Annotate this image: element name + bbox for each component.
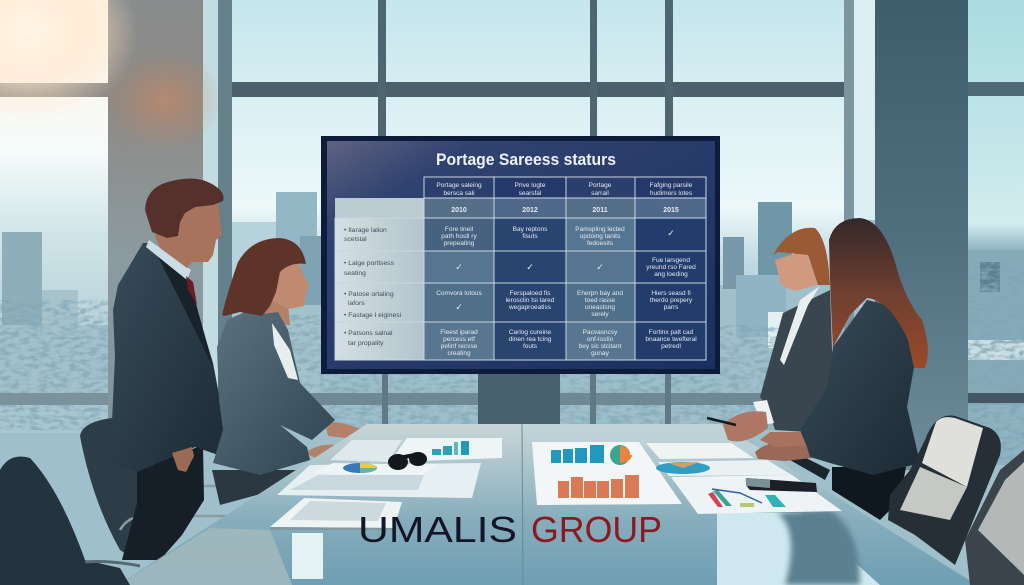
chair base rails — [120, 486, 250, 530]
orange glare on pillar — [105, 50, 225, 150]
column headers and cell text: fisuts — [522, 233, 538, 240]
column headers and cell text: lerosclin tsi tared — [506, 297, 555, 304]
column headers and cell text: Bay reptons — [513, 226, 548, 233]
paper under hands — [330, 440, 402, 462]
bright reflection — [292, 533, 323, 579]
dark trousers — [212, 470, 300, 505]
tablet — [707, 418, 736, 425]
column headers and cell text: bersca sali — [443, 190, 475, 197]
chair: white right — [888, 416, 1001, 565]
column headers and cell text: serely — [591, 311, 609, 318]
lapel shadow — [152, 245, 212, 365]
column headers and cell text: ✓ — [596, 262, 604, 272]
column headers and cell text: ✓ — [455, 262, 463, 272]
hair — [829, 218, 928, 368]
documents right group — [532, 442, 842, 514]
upper right sheet — [646, 443, 754, 459]
person: woman with long dark hair — [755, 218, 928, 520]
hands — [755, 440, 812, 461]
window reflection — [717, 513, 880, 585]
column headers and cell text: Portage — [589, 182, 612, 189]
column headers and cell text: Hiers seasd fi — [651, 290, 691, 297]
brand logo — [358, 509, 662, 550]
window: left — [0, 0, 108, 430]
column headers and cell text: ✓ — [667, 228, 675, 238]
column headers and cell text: Fue larsgend — [652, 257, 690, 264]
teal bars — [551, 445, 604, 463]
column headers and cell text: ✓ — [455, 302, 463, 312]
row labels: scelstal — [344, 236, 367, 243]
column headers and cell text: percess etf — [443, 336, 475, 343]
column headers and cell text: creating — [447, 350, 471, 357]
column headers and cell text: Fortinx palt cad — [649, 329, 694, 336]
large report sheet — [277, 463, 481, 498]
person: woman with red-brown hair — [707, 228, 833, 480]
hand and cuff — [172, 447, 194, 472]
pie sheet — [656, 460, 792, 476]
window: centre — [222, 0, 862, 430]
row labels: lafors — [348, 300, 365, 307]
hand with stylus — [723, 411, 768, 442]
column headers and cell text: 2012 — [522, 207, 538, 214]
table sunlight patches — [118, 528, 292, 585]
column headers and cell text: Pamspling lected — [575, 226, 625, 233]
column headers and cell text: path hostl ry — [441, 233, 477, 240]
line chart sheet — [671, 475, 842, 514]
column headers and cell text: wegaproeatiss — [508, 304, 552, 311]
column headers and cell text: Comvora lotous — [436, 290, 483, 297]
column headers and cell text: Fafging parsile — [650, 182, 693, 189]
smartphone — [746, 478, 817, 492]
column headers and cell text: 2010 — [451, 207, 467, 214]
orange bars — [558, 475, 639, 498]
trousers — [122, 445, 204, 560]
column headers and cell text: Carlog cureine — [509, 329, 552, 336]
column headers and cell text: 2015 — [663, 207, 679, 214]
row labels — [344, 227, 402, 347]
row labels: • Fastage ł eiginesi — [344, 312, 402, 319]
sunlight glare — [0, 0, 138, 122]
neck and face — [155, 203, 222, 268]
cuff — [753, 400, 774, 425]
row labels: • Patsons salnal — [344, 330, 393, 337]
row labels: • Patose ortaling — [344, 291, 394, 298]
wall screen — [321, 136, 720, 374]
column headers and cell text: Fleest iparad — [440, 329, 478, 336]
small top sheet — [312, 463, 438, 475]
column headers and cell text: Eherpn bay and — [577, 290, 623, 297]
person: man in suit — [110, 178, 227, 560]
reflected figures — [777, 510, 860, 585]
skyline texture — [0, 300, 108, 430]
dark trousers — [770, 440, 830, 480]
shirt collar — [146, 240, 191, 280]
status table — [335, 177, 706, 360]
sunglasses — [388, 452, 427, 470]
upper cushion — [922, 417, 983, 487]
column headers and cell text: ang loeding — [654, 271, 688, 278]
column headers and cell text: hudimers lotes — [650, 190, 693, 197]
neck — [262, 295, 290, 325]
column headers and cell text: Fore lineil — [445, 226, 474, 233]
column headers and cell text: sarrail — [591, 190, 609, 197]
hair — [773, 228, 830, 285]
big chart sheet — [532, 442, 682, 505]
tie — [186, 276, 197, 305]
hands — [325, 422, 372, 442]
column headers and cell text: Pacvasncsy — [583, 329, 618, 336]
GROUP wordmark: GROUP — [531, 509, 662, 550]
table shade band — [525, 424, 770, 455]
table cells — [335, 177, 706, 360]
chair: bottom-left — [0, 456, 140, 585]
column headers and cell text: therdo prepery — [650, 297, 693, 304]
column headers and cell text: bnaance twefteral — [645, 336, 697, 343]
blouse — [272, 323, 298, 380]
face — [270, 262, 310, 309]
jacket — [800, 300, 920, 475]
table seam — [522, 424, 523, 585]
window: right — [968, 0, 1024, 430]
chair: behind man — [80, 418, 140, 560]
row labels: seating — [344, 270, 366, 277]
column headers and cell text: onf-lostin — [587, 336, 614, 343]
column headers and cell text: pelinf recvse — [441, 343, 478, 350]
person: woman in grey suit — [212, 238, 372, 505]
face — [775, 250, 818, 291]
report table lines — [290, 475, 424, 490]
window frames — [0, 0, 1024, 430]
column headers and cell text: dinen rea tcing — [509, 336, 552, 343]
column headers and cell text — [436, 182, 697, 357]
column headers and cell text: Ferspaloed fis — [510, 290, 551, 297]
column headers and cell text: gunay — [591, 350, 610, 357]
pillar: right — [875, 0, 968, 470]
column headers and cell text: prepeating — [444, 240, 475, 247]
column headers and cell text: uneastsng — [585, 304, 615, 311]
column headers and cell text: parrs — [664, 304, 679, 311]
column headers and cell text: 2011 — [592, 207, 608, 214]
suit jacket — [110, 243, 227, 472]
column headers and cell text: Portage saleing — [436, 182, 482, 189]
screen title: Portage Sareess staturs — [436, 151, 616, 169]
hair — [222, 238, 306, 316]
column headers and cell text: ✓ — [526, 262, 534, 272]
row labels: tar propality — [348, 340, 384, 347]
pillar: left — [108, 0, 203, 430]
column headers and cell text: searsfal — [519, 190, 542, 197]
conference table — [118, 424, 977, 585]
screen support column — [478, 370, 560, 426]
column headers and cell text: petredl — [661, 343, 681, 350]
column headers and cell text: Prive logte — [515, 182, 546, 189]
hair — [145, 178, 224, 238]
trousers — [832, 467, 906, 520]
lower cushion — [900, 467, 967, 520]
column headers and cell text: toed rasse — [585, 297, 616, 304]
grey jacket — [213, 312, 335, 475]
column headers and cell text: bey sic stcitant — [579, 343, 622, 350]
column headers and cell text: fedoesits — [587, 240, 614, 247]
documents left group — [270, 438, 502, 530]
row labels: • Ilarage lalion — [344, 227, 387, 234]
UMALIS wordmark: UMALIS — [358, 509, 517, 550]
jacket — [760, 290, 833, 433]
back chart paper — [390, 438, 502, 462]
row labels: • Lalge portlsess — [344, 260, 395, 267]
pie chart — [610, 445, 632, 465]
chair: far right — [965, 450, 1024, 585]
column headers and cell text: yreund rso Fared — [646, 264, 696, 271]
column headers and cell text: fouts — [523, 343, 538, 350]
column headers and cell text: updoing tanits — [580, 233, 621, 240]
skyline buildings — [0, 192, 1024, 465]
keyboard — [270, 498, 402, 530]
shirt — [780, 286, 820, 365]
mini pie — [343, 463, 377, 473]
chair: far right highlight — [978, 462, 1024, 575]
